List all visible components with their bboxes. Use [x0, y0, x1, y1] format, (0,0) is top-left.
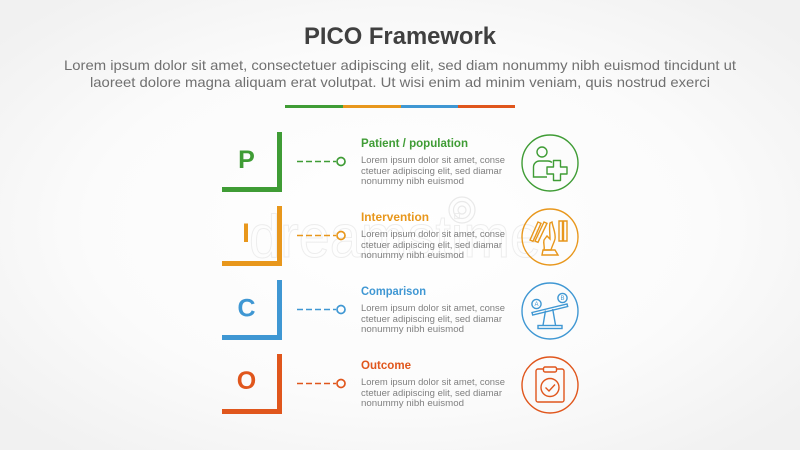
body P	[361, 155, 505, 186]
bracket C	[222, 280, 280, 338]
connector O	[297, 380, 345, 388]
heading P: Patient / population	[361, 136, 468, 150]
heading O: Outcome	[361, 358, 411, 372]
body O: nonummy nibh euismod	[361, 398, 464, 408]
icon: hand with bars	[522, 209, 578, 265]
body C	[361, 303, 505, 334]
subtitle text: Lorem ipsum dolor sit amet, consectetuer adipiscing elit, sed diam nonummy nibh euismod tincidunt ut	[64, 57, 736, 73]
icon: balance scale: A	[534, 302, 539, 308]
icon: balance scale	[522, 283, 578, 339]
heading I: Intervention	[361, 210, 429, 224]
title: PICO Framework	[304, 23, 497, 50]
colored divider	[285, 105, 515, 108]
subtitle text	[64, 57, 736, 90]
bracket O	[222, 354, 280, 412]
body O: Lorem ipsum dolor sit amet, conse	[361, 377, 505, 387]
connector C	[297, 306, 345, 314]
icon: balance scale: B	[560, 296, 565, 302]
body C: nonummy nibh euismod	[361, 324, 464, 334]
row: Outcome	[222, 354, 578, 413]
body I: Lorem ipsum dolor sit amet, conse	[361, 229, 505, 239]
connector I	[297, 232, 345, 240]
body C: ctetuer adipiscing elit, sed diamar	[361, 314, 502, 324]
body O	[361, 377, 505, 408]
connector P	[297, 158, 345, 166]
subtitle text: laoreet dolore magna aliquam erat volutpat. Ut wisi enim ad minim veniam, quis nostrud exerci	[90, 74, 710, 90]
letter C: C	[237, 294, 256, 322]
row: Comparison	[222, 280, 578, 339]
letter P: P	[238, 146, 255, 174]
body I	[361, 229, 505, 260]
row: Patient	[222, 132, 578, 191]
body P: ctetuer adipiscing elit, sed diamar	[361, 166, 502, 176]
bracket P	[222, 132, 280, 190]
body P: Lorem ipsum dolor sit amet, conse	[361, 155, 505, 165]
body P: nonummy nibh euismod	[361, 176, 464, 186]
body O: ctetuer adipiscing elit, sed diamar	[361, 388, 502, 398]
watermark: dreamstime	[249, 203, 541, 270]
body I: nonummy nibh euismod	[361, 250, 464, 260]
letter I	[244, 224, 248, 242]
icon: clipboard check	[522, 357, 578, 413]
body C: Lorem ipsum dolor sit amet, conse	[361, 303, 505, 313]
heading C: Comparison	[361, 284, 426, 298]
letter O: O	[237, 367, 256, 395]
body I: ctetuer adipiscing elit, sed diamar	[361, 240, 502, 250]
icon: patient plus	[522, 135, 578, 191]
bracket I	[222, 206, 280, 264]
row: Intervention	[222, 206, 578, 265]
